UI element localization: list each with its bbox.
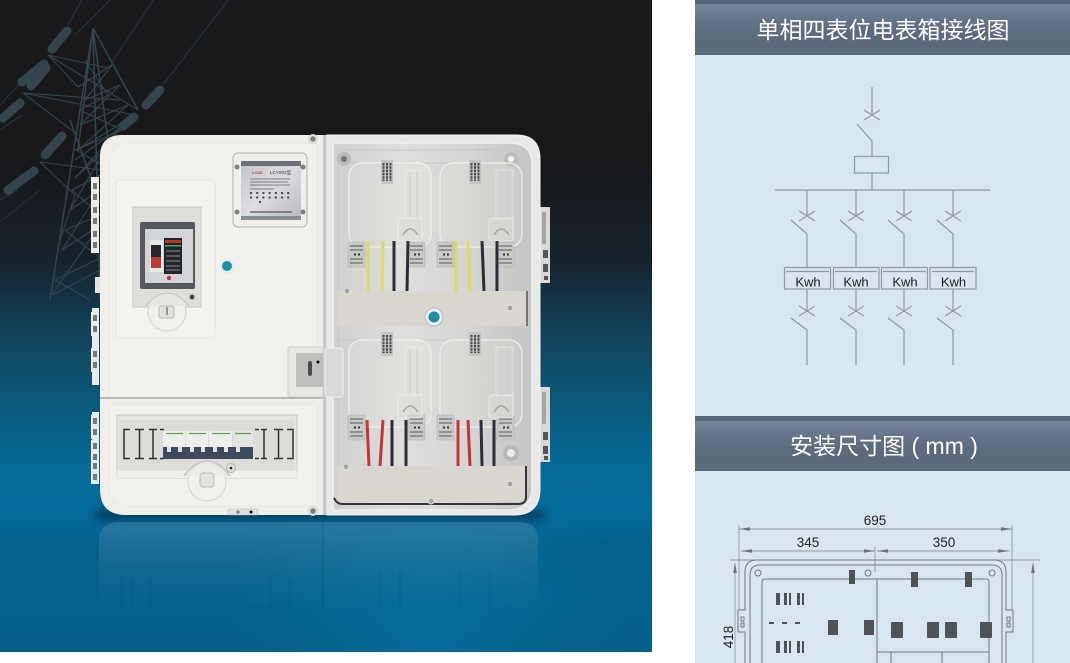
meter: Kwh 2 (834, 268, 879, 290)
corner screw (308, 506, 318, 516)
hinge strip (323, 135, 328, 515)
bottom hinge block (228, 509, 258, 515)
meter: Kwh 3: Kwh (892, 274, 918, 290)
door latch clear cover (325, 348, 343, 397)
meter: Kwh 1: Kwh (795, 274, 821, 290)
dimension labels: 350 (933, 535, 955, 550)
cabinet assembly (91, 134, 550, 516)
meter: Kwh 3 (882, 268, 928, 290)
corner mounting bosses (337, 152, 519, 461)
meter: Kwh 2: Kwh (843, 274, 869, 290)
door lock (288, 347, 323, 397)
box outline (738, 560, 1013, 663)
miniature breakers (163, 431, 253, 459)
wiring diagram (775, 87, 990, 365)
cabinet right open body (325, 135, 540, 515)
clear handle (146, 293, 195, 331)
upper wires (368, 241, 497, 291)
clear handle (184, 461, 236, 501)
lower right meter window (440, 340, 522, 427)
meter: Kwh 4 (930, 268, 976, 290)
lower cable cover (334, 464, 526, 504)
power transmission tower (0, 0, 228, 300)
nameplate (233, 153, 307, 227)
din rail brackets (124, 430, 293, 458)
title: 单相四表位电表箱接线图 (756, 17, 1010, 43)
blue seal (220, 258, 234, 274)
mounting slots (769, 570, 992, 653)
nameplate: LCY002型 (270, 169, 292, 175)
lower wires (367, 420, 494, 466)
dimension labels (721, 513, 955, 648)
heading band: installation dimensions (695, 416, 1070, 471)
upper left meter window (349, 163, 431, 247)
title: 安装尺寸图 ( mm ) (790, 433, 978, 459)
corner screw (308, 134, 318, 144)
panel: wiring diagram background (695, 0, 1070, 663)
heading band: wiring diagram (695, 0, 1070, 55)
breaker compartment cover (116, 180, 215, 338)
cabinet reflection (99, 522, 538, 608)
breaker window (133, 207, 201, 307)
right side mounting tabs (539, 207, 550, 462)
upper cable cover (337, 288, 527, 326)
dimension labels: 418 (721, 626, 736, 648)
sub breaker window (117, 415, 297, 501)
background photo panel (0, 0, 652, 652)
lower meter positions (348, 332, 522, 466)
floor shadow (95, 510, 545, 519)
cabinet left door (100, 134, 323, 516)
lower left meter window (349, 340, 431, 427)
meter: Kwh 1 (784, 268, 830, 290)
dimension labels: 345 (797, 535, 819, 550)
main breaker (145, 229, 193, 283)
dimension labels: 695 (864, 513, 886, 528)
left side mounting tabs (91, 177, 100, 484)
dimension lines (730, 525, 1040, 663)
dimension drawing (721, 513, 1040, 663)
upper right meter window (440, 163, 522, 247)
nameplate: LCXD (252, 171, 263, 175)
meter: Kwh 4: Kwh (941, 274, 966, 290)
upper meter positions (348, 160, 522, 291)
